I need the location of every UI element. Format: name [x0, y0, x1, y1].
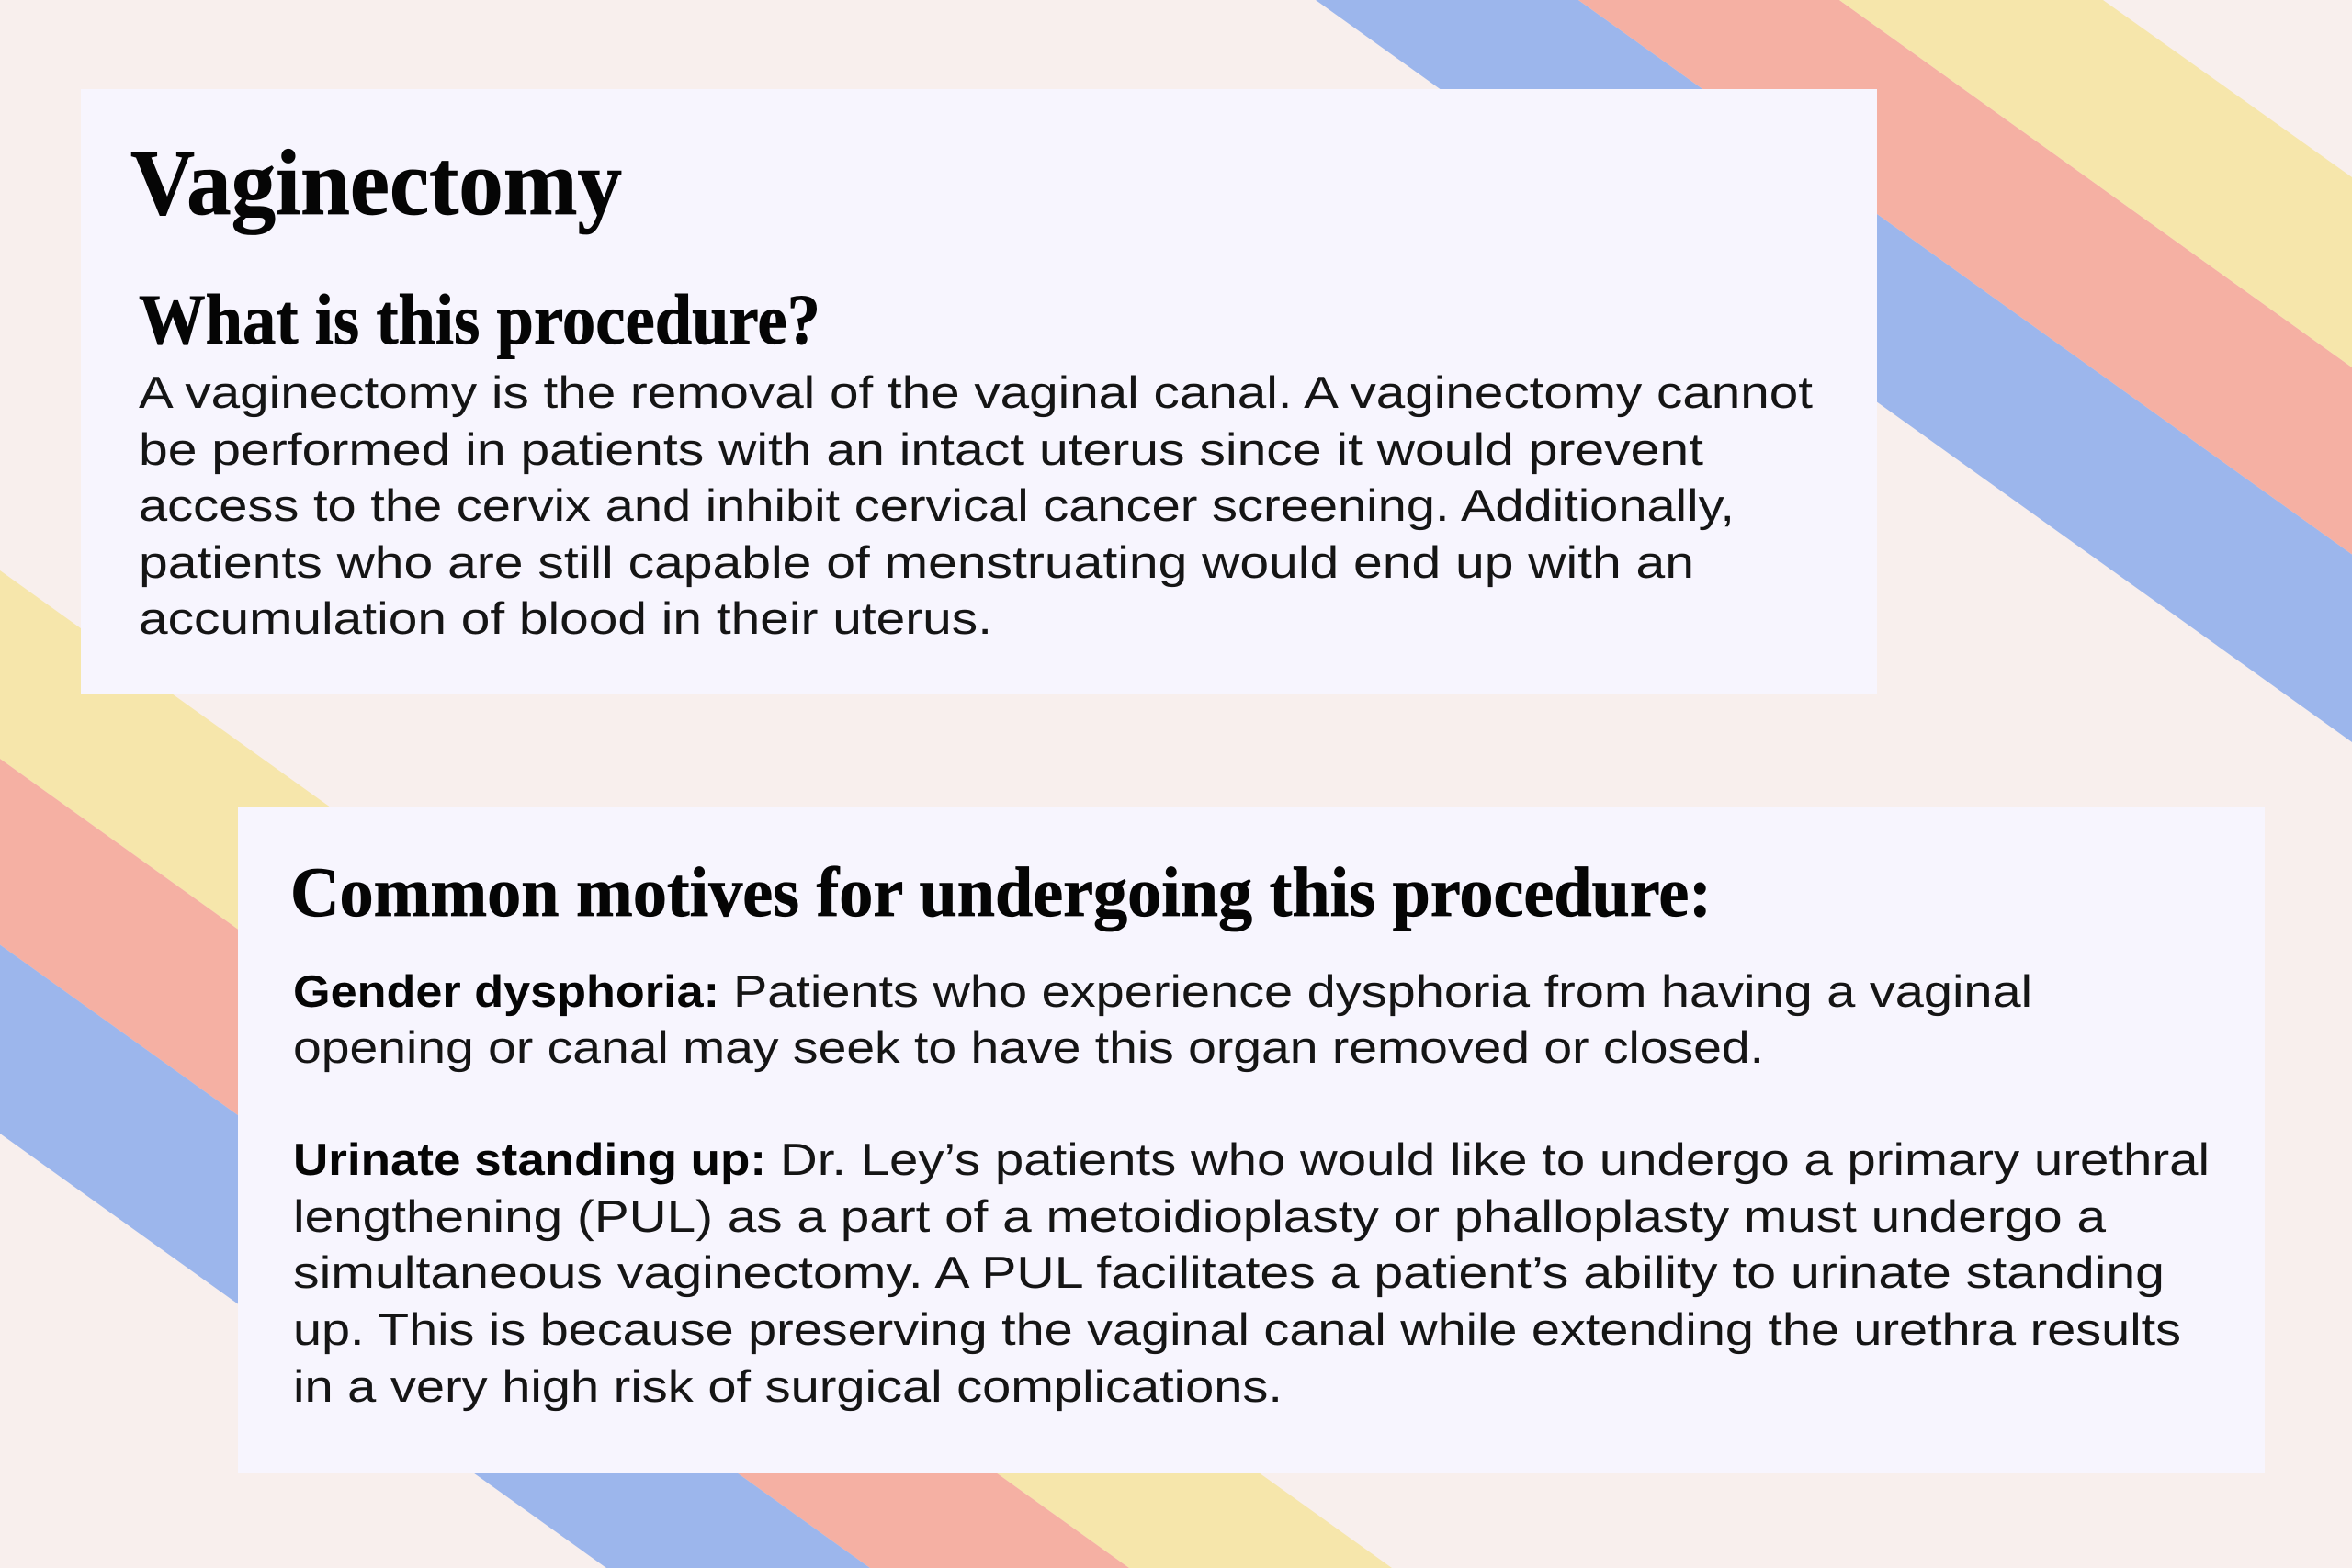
- text block: procedure description: be performed in patients with an intact uterus since it would prevent: [139, 425, 1703, 475]
- text block: procedure description: A vaginectomy is the removal of the vaginal canal. A vaginectomy cannot: [139, 368, 1813, 418]
- title: Vaginectomy: [130, 131, 622, 235]
- text block: urinate standing up: up. This is because preserving the vaginal canal while extending the urethra results: [293, 1305, 2181, 1355]
- text block: urinate standing up: Urinate standing up:: [293, 1135, 766, 1185]
- text block: urinate standing up: [293, 1135, 2210, 1412]
- text block: procedure description: accumulation of blood in their uterus.: [139, 594, 992, 644]
- text block: procedure description: patients who are still capable of menstruating would end up with an: [139, 538, 1694, 588]
- panel: what is this procedure: [81, 89, 1877, 694]
- text block: gender dysphoria: Gender dysphoria:: [293, 967, 719, 1017]
- text block: procedure description: [139, 368, 1813, 644]
- text block: urinate standing up: in a very high risk of surgical complications.: [293, 1362, 1283, 1412]
- bottom-left diagonal stripes: [0, 570, 1392, 1568]
- top-right diagonal stripes: [1316, 0, 2352, 742]
- text block: gender dysphoria: [293, 967, 2032, 1073]
- text block: gender dysphoria: opening or canal may seek to have this organ removed or closed.: [293, 1023, 1764, 1073]
- heading: common motives: Common motives for undergoing this procedure:: [290, 852, 1712, 931]
- text block: urinate standing up: simultaneous vaginectomy. A PUL facilitates a patient’s ability to urinate standing: [293, 1248, 2165, 1298]
- text block: procedure description: access to the cervix and inhibit cervical cancer screening. Additionally,: [139, 481, 1735, 531]
- text block: gender dysphoria: Patients who experience dysphoria from having a vaginal: [733, 967, 2032, 1017]
- text block: urinate standing up: lengthening (PUL) as a part of a metoidioplasty or phalloplasty must undergo a: [293, 1192, 2107, 1242]
- panel: common motives: [238, 807, 2265, 1473]
- text block: urinate standing up: Dr. Ley’s patients who would like to undergo a primary urethral: [780, 1135, 2210, 1185]
- heading: what is this procedure: What is this procedure?: [139, 279, 820, 359]
